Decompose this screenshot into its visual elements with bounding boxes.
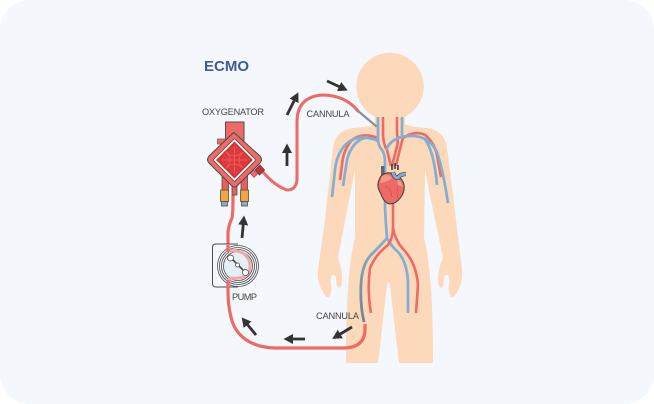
pump rotor [231,258,245,272]
body silhouette [318,53,462,363]
arrow 6 [340,327,352,334]
title: ECMO [204,58,249,75]
labels: OXYGENATOR [202,107,264,117]
pump inner tube [228,251,250,281]
labels: CANNULA [316,311,360,321]
arrow 5 [292,338,305,340]
tube: femoral cannula section in body [361,238,387,322]
vessels: descending aorta [369,200,418,313]
tube: return to patient [263,95,376,190]
labels: CANNULA [306,109,350,119]
oxygenator top housing [226,122,244,147]
vessels: veins [332,117,448,313]
arrow 3 [242,224,243,238]
pump housing [212,244,238,287]
vessels: upper arteries [340,117,441,180]
labels: PUMP [232,292,257,302]
arrow 7 [327,81,340,87]
arrow 4 [247,324,256,335]
arrow 1 [287,100,294,115]
oxygenator [208,122,264,206]
oxygenator outlet [255,165,264,175]
flow arrows [242,81,352,339]
pump [212,244,258,288]
labels [202,107,360,321]
oxygenator diamond [208,133,262,187]
arrow 2 [286,152,288,166]
tube: drainage via pump [228,195,365,348]
oxygenator legs [220,172,248,206]
heart [378,163,406,204]
pump rings [218,246,258,286]
